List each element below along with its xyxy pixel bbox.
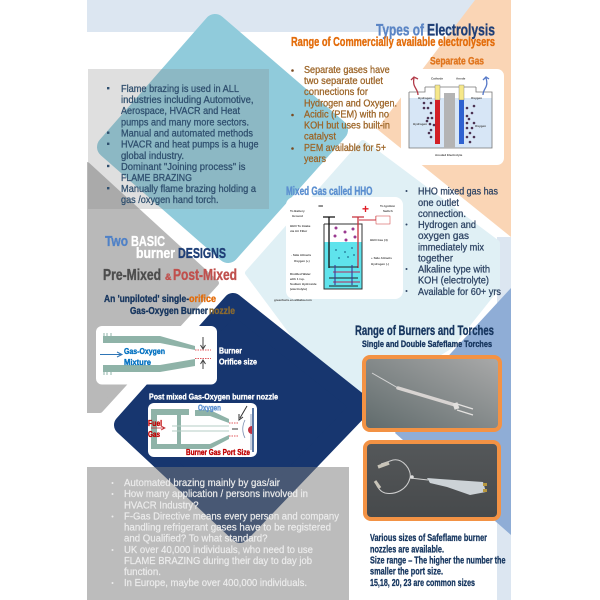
diagram: HHO electrolyser: (electrolyte) (290, 287, 307, 291)
text block: separate gas points: years (304, 153, 326, 165)
text block: brazing points: FLAME BRAZING (121, 172, 192, 184)
diagram: HHO electrolyser (274, 197, 403, 302)
diagram: post mixed nozzle (148, 402, 257, 457)
text block: brazing points: global industry. (121, 150, 184, 162)
text block: industry points: Automated brazing mainly by gas/air (124, 477, 280, 489)
text block: HHO points: connection. (418, 208, 466, 220)
text block: industry points: FLAME BRAZING during their day to day job (124, 555, 312, 567)
gas bubbles (423, 102, 475, 143)
text block: separate gas points: Acidic (PEM) with no (304, 108, 389, 120)
diagram: HHO electrolyser: To Ignition (380, 204, 395, 208)
heading: mixed gas: Mixed Gas called HHO (286, 186, 373, 198)
text block: brazing points: Manual and automated methods (121, 128, 253, 140)
arrow: fuel gas (151, 426, 165, 430)
diagram: premixed nozzle: Mixture (124, 357, 151, 367)
orifice markers (195, 350, 211, 358)
diagram: HHO electrolyser: Ground (292, 214, 303, 218)
diagram: separate gas electrolysis cell: Hydrogen (413, 122, 427, 126)
text block: HHO points: KOH (electrolyte) (418, 274, 489, 286)
text block: separate gas points: Hydrogen and Oxygen. (304, 98, 397, 110)
diagram: separate gas electrolysis cell: Anode (456, 76, 466, 80)
text block: industry points: F-Gas Directive means every person and company (124, 510, 340, 522)
text block: brazing points: Flame brazing is used in ALL (121, 83, 239, 95)
diagram: HHO electrolyser: greenfacts.en.alibaba.com (274, 298, 312, 302)
panel: industry facts (87, 467, 349, 600)
diagram: HHO electrolyser: − (318, 201, 323, 211)
diagram: HHO electrolyser: - Side Attracts (291, 253, 312, 257)
heading: unpiloted burner nozzle: orifice (189, 293, 216, 305)
text block: industry points: UK over 40,000 individuals, who need to use (124, 544, 313, 556)
bullets (112, 482, 114, 584)
text block: separate gas points: two separate outlet (304, 75, 383, 87)
text block: industry points: HVACR Industry? (124, 500, 199, 512)
diagram: HHO electrolyser: HHO To Intake (290, 224, 311, 228)
text block: brazing points: Manually flame brazing holding a (121, 183, 256, 195)
shape: peach diamond (377, 0, 511, 237)
heading: pre-mixed and post-mixed: Post-Mixed (173, 267, 237, 284)
panel: flame brazing overview (88, 69, 269, 209)
diagram: post mixed nozzle: Fuel (148, 418, 162, 428)
diagram: separate gas electrolysis cell: Hydrogen (418, 96, 432, 100)
heading: post mixed nozzle: Post mixed Gas-Oxygen burner nozzle (149, 392, 278, 402)
electrode plates (329, 265, 360, 286)
text block: industry points: and Qualified? To what standard? (124, 532, 268, 544)
heading: two basic burner designs (105, 233, 226, 262)
label: burner orifice size (219, 346, 257, 366)
text block: separate gas points: PEM available for 5+ (304, 142, 386, 154)
diagram: HHO electrolyser: HHO Gas (4) (370, 238, 388, 242)
text block: brazing points: gas /oxygen hand torch. (121, 194, 218, 206)
text block: nozzle sizes: Various sizes of Safeflame burner (370, 532, 487, 544)
diagram: separate gas electrolysis cell: Anoded Electrolyte (435, 153, 463, 157)
shape: teal diamond (108, 25, 337, 252)
diagram: post mixed nozzle: Oxygen (198, 402, 221, 412)
shape: medium blue diamond (395, 288, 511, 535)
diagram: HHO electrolyser: Oxygen (+) (294, 259, 310, 263)
text block: HHO points: Hydrogen and (418, 219, 476, 231)
text block: industry points: function. (124, 566, 161, 578)
text block: nozzle sizes (370, 532, 506, 589)
heading: types of electrolysis: Types of (376, 22, 424, 40)
text block: nozzle sizes: smaller the port size. (370, 566, 443, 578)
arrow: hydrogen out (411, 77, 418, 95)
heading: pre-mixed and post-mixed: & (165, 272, 172, 282)
shape: navy diamond (124, 303, 360, 533)
text block: brazing points (121, 83, 259, 206)
photo: single torch (364, 357, 500, 430)
text block: separate gas points (291, 64, 397, 165)
heading: separate gas: Separate Gas (430, 56, 484, 68)
diagram: HHO electrolyser: via Air Filter (290, 229, 308, 233)
heading: range of burners and torches: Range of Burners and Torches (355, 323, 494, 338)
diagram: separate gas electrolysis cell (401, 69, 504, 165)
text block: HHO points: one outlet (418, 197, 459, 209)
text block: brazing points: Aerospace, HVACR and Heat (121, 105, 240, 117)
heading: unpiloted burner nozzle: An 'unpiloted' single- (104, 293, 189, 305)
diagram: separate gas electrolysis cell: Oxygen (475, 124, 486, 128)
text block: HHO points: Available for 60+ yrs (418, 286, 501, 298)
text block: brazing points: HVACR and heat pumps is a huge (121, 138, 259, 150)
arrow: gas flow (100, 352, 122, 357)
text block: separate gas points: connections for (304, 86, 368, 98)
heading: unpiloted burner nozzle: Gas-Oxygen Burner (130, 305, 208, 317)
heading: pre-mixed and post-mixed: Pre-Mixed (103, 267, 161, 284)
shape: grey diamond (87, 165, 216, 410)
gas bubbles (334, 226, 356, 242)
diagram: HHO electrolyser: To Battery (290, 209, 305, 213)
arrow: oxygen out (483, 77, 489, 95)
text block: separate gas points: KOH but uses built-in (304, 120, 390, 132)
heading: unpiloted burner nozzle: nozzle (209, 305, 235, 317)
diagram: separate gas electrolysis cell: Oxygen (471, 96, 482, 100)
text block: industry points: handling refrigerant gases have to be registered (124, 522, 331, 534)
diagram: separate gas electrolysis cell: Cathode (431, 76, 443, 80)
diagram: HHO electrolyser: with 1 tsp. (289, 277, 305, 281)
heading: pre-mixed and post-mixed (103, 267, 237, 284)
text block: brazing points: industries including Automotive, (121, 94, 254, 106)
photo: double torch (365, 442, 499, 519)
diagram: HHO electrolyser: Switch (383, 209, 393, 213)
heading: types of electrolysis (376, 22, 495, 40)
text block: industry points: In Europe, maybe over 400,000 individuals. (124, 577, 307, 589)
text block: industry points (124, 477, 340, 589)
diagram: premixed nozzle (96, 326, 217, 384)
text block: nozzle sizes: nozzles are available. (370, 544, 444, 556)
text block: brazing points: Dominant "Joining process" is (121, 161, 246, 173)
text block: HHO points: oxygen gas (418, 230, 469, 242)
text block: nozzle sizes: Size range – The higher the number the (370, 554, 506, 566)
text block: HHO points: HHO mixed gas has (418, 186, 498, 198)
subheading: commercial electrolysers: Range of Commercially available electrolysers (291, 35, 495, 49)
diagram: HHO electrolyser: Sodium Hydroxide (290, 282, 317, 286)
heading: two basic burner designs: DESIGNS (178, 245, 226, 262)
diagram: HHO electrolyser: Hydrogen (-) (371, 262, 389, 266)
heading: types of electrolysis: Electrolysis (427, 22, 495, 40)
shape: pale cyan diamond (248, 143, 497, 400)
heading: two basic burner designs: Two (105, 233, 128, 250)
shape: top pale blue band (87, 0, 511, 32)
text block: HHO points: Alkaline type with (418, 264, 490, 276)
text block: separate gas points: catalyst (304, 130, 336, 142)
label: burner orifice size: Burner (219, 346, 243, 356)
diagram: premixed nozzle: Gas-Oxygen (124, 346, 165, 356)
label: burner orifice size: Orifice size (219, 356, 257, 366)
diagram: HHO electrolyser: + Side Attracts (371, 256, 392, 260)
subheading: safeflame torches: Single and Double Safeflame Torches (362, 339, 492, 350)
diagram: post mixed nozzle: Gas (148, 429, 160, 439)
text block: HHO points: immediately mix (418, 242, 485, 254)
bullets (107, 87, 109, 189)
diagram: post mixed nozzle: Burner Gas Port Size (186, 447, 250, 457)
text block: nozzle sizes: 15,18, 20, 23 are common sizes (370, 577, 475, 589)
diagram: HHO electrolyser: + (362, 202, 369, 216)
text block: separate gas points: Separate gases have (304, 64, 390, 76)
heading: unpiloted burner nozzle (104, 293, 235, 317)
text block: industry points: How many application / persons involved in (124, 488, 308, 500)
background shapes (87, 0, 511, 600)
shape: right pale blue strip (497, 237, 511, 600)
diagram: HHO electrolyser: Distilled Water (290, 272, 312, 276)
text block: HHO points (406, 186, 501, 298)
text block: HHO points: together (418, 252, 453, 264)
heading: two basic burner designs: BASIC (131, 233, 165, 250)
heading: two basic burner designs: burner (136, 245, 175, 262)
text block: brazing points: pumps and many more sectors. (121, 116, 249, 128)
